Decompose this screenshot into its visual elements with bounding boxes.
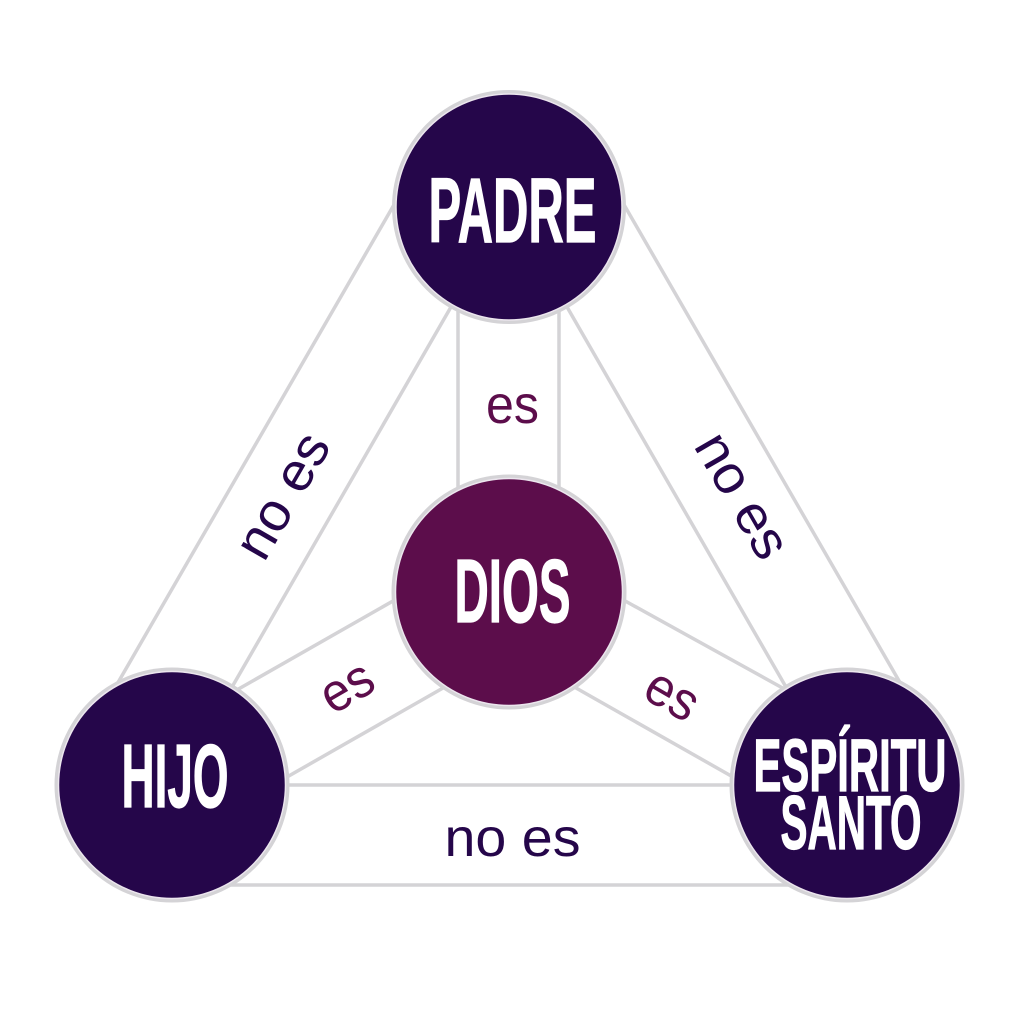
label: no es bottom: no es xyxy=(444,808,580,868)
label: es Espiritu: es xyxy=(635,655,710,734)
label: no es right: no es xyxy=(683,422,803,569)
node: Hijo: HIJO xyxy=(122,727,228,827)
node: Padre xyxy=(392,90,626,324)
label: es Hijo: es xyxy=(309,647,384,726)
node: Espiritu Santo xyxy=(730,668,964,902)
node: Padre: PADRE xyxy=(428,160,596,262)
node: Dios xyxy=(392,474,626,710)
node: Dios: DIOS xyxy=(454,542,570,642)
label: es Padre: es xyxy=(486,375,539,435)
label: no es left: no es xyxy=(222,422,342,569)
node: Hijo xyxy=(54,668,290,902)
